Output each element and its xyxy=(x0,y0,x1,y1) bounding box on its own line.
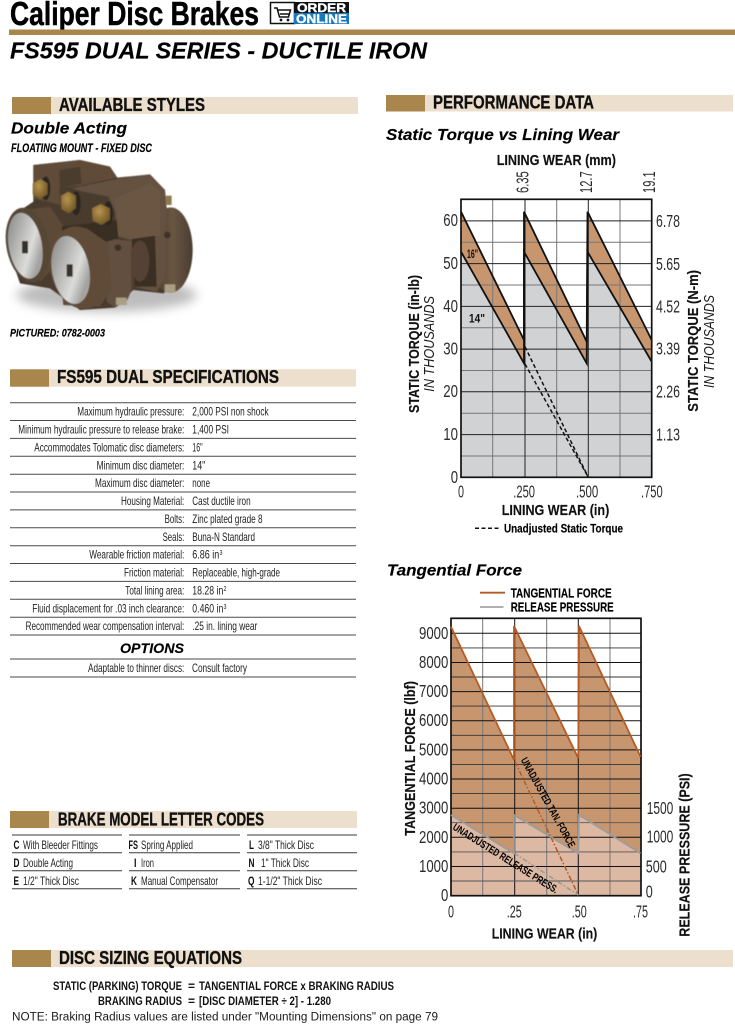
chart: static torque vs lining wear: 1.13 xyxy=(656,424,680,444)
chart: tangential force and release pressure: 1000 xyxy=(419,856,448,876)
letter codes table: I xyxy=(134,856,136,870)
specifications table: 2 xyxy=(224,586,227,593)
specifications table xyxy=(10,403,356,677)
chart: static torque vs lining wear: .500 xyxy=(576,481,598,501)
chart: tangential force and release pressure: 500 xyxy=(646,856,667,876)
note: NOTE: Braking Radius values are listed under "Mounting Dimensions" on page 79 xyxy=(12,1012,438,1024)
letter codes table: Iron xyxy=(141,856,154,870)
specifications table: Seals: xyxy=(163,530,184,544)
equations: TANGENTIAL FORCE x BRAKING RADIUS xyxy=(199,979,394,993)
specifications table: 3 xyxy=(224,604,227,611)
specifications table: Recommended wear compensation interval: xyxy=(26,619,184,633)
chart: static torque vs lining wear: 4.52 xyxy=(656,296,680,316)
chart: tangential force and release pressure: 0 xyxy=(441,885,448,905)
chart: tangential force and release pressure xyxy=(402,586,693,942)
letter codes table: K xyxy=(131,874,137,888)
chart: static torque vs lining wear: 16" xyxy=(467,247,478,261)
heading: performance data xyxy=(386,92,733,112)
letter codes table: Double Acting xyxy=(23,856,73,870)
chart: tangential force and release pressure: 8000 xyxy=(419,652,448,672)
specifications table: 0.460 in xyxy=(192,601,223,615)
chart heading: static torque: Static Torque vs Lining Wear xyxy=(386,127,620,144)
letter codes table: With Bleeder Fittings xyxy=(23,838,98,852)
chart: static torque vs lining wear: LINING WEAR (in) xyxy=(502,502,609,519)
heading: performance data: PERFORMANCE DATA xyxy=(433,92,594,112)
chart: static torque vs lining wear: Unadjusted Static Torque xyxy=(504,522,623,536)
chart: tangential force and release pressure: 1000 xyxy=(647,826,673,846)
heading: disc sizing equations xyxy=(12,947,733,968)
chart: tangential force and release pressure: UNADJUSTED TAN. FORCE xyxy=(518,756,577,850)
chart: tangential force and release pressure: RELEASE PRESSURE xyxy=(511,601,614,615)
chart: tangential force and release pressure: .25 xyxy=(507,901,522,921)
chart: tangential force and release pressure: 2000 xyxy=(419,827,448,847)
chart: static torque vs lining wear: 3.39 xyxy=(656,338,680,358)
chart: tangential force and release pressure: 0 xyxy=(448,901,454,921)
specifications table: Maximum hydraulic pressure: xyxy=(77,405,184,419)
specifications table: Zinc plated grade 8 xyxy=(192,512,263,526)
specifications table: Consult factory xyxy=(192,661,247,675)
chart: static torque vs lining wear: 0 xyxy=(451,467,458,487)
chart: static torque vs lining wear: .250 xyxy=(513,481,535,501)
specifications table: 2,000 PSI non shock xyxy=(192,405,269,419)
style subtitle: FLOATING MOUNT - FIXED DISC xyxy=(11,143,153,155)
letter codes table: 1-1/2" Thick Disc xyxy=(258,874,322,888)
chart: tangential force and release pressure: .75 xyxy=(633,901,648,921)
chart: static torque vs lining wear: STATIC TORQUE (N-m) xyxy=(685,270,702,412)
chart: static torque vs lining wear: 6.78 xyxy=(656,211,680,231)
equations: STATIC (PARKING) TORQUE xyxy=(53,979,182,993)
equations xyxy=(53,979,394,1008)
equations: = xyxy=(188,979,195,993)
specifications table: Minimum disc diameter: xyxy=(97,458,184,472)
chart: static torque vs lining wear: 20 xyxy=(443,381,458,401)
heading: disc sizing equations: DISC SIZING EQUATIONS xyxy=(59,947,242,968)
specifications table: Fluid displacement for .03 inch clearance: xyxy=(32,601,184,615)
specifications table: Cast ductile iron xyxy=(192,494,251,508)
specifications table: 1,400 PSI xyxy=(192,422,229,436)
chart: tangential force and release pressure: 4000 xyxy=(419,768,448,788)
equations: [DISC DIAMETER ÷ 2] - 1.280 xyxy=(199,994,331,1008)
chart: static torque vs lining wear: IN THOUSANDS xyxy=(701,295,718,388)
letter codes table: 3/8" Thick Disc xyxy=(258,838,314,852)
chart: tangential force and release pressure: 7000 xyxy=(419,681,448,701)
chart: static torque vs lining wear: 19.1 xyxy=(639,171,659,193)
specifications table: 16" xyxy=(192,440,203,454)
heading: available styles: AVAILABLE STYLES xyxy=(59,94,205,115)
chart: static torque vs lining wear: LINING WEAR (mm) xyxy=(497,152,616,169)
chart heading: tangential force: Tangential Force xyxy=(387,563,522,580)
specifications table: Maximum disc diameter: xyxy=(95,476,184,490)
chart: tangential force and release pressure: UNADJUSTED RELEASE PRESS. xyxy=(450,821,560,896)
letter codes table: Manual Compensator xyxy=(141,874,218,888)
chart: static torque vs lining wear: 60 xyxy=(443,210,458,230)
chart: tangential force and release pressure: 6000 xyxy=(419,710,448,730)
letter codes table: L xyxy=(249,838,254,852)
letter codes table: N xyxy=(248,856,254,870)
chart: static torque vs lining wear: STATIC TORQUE (in-lb) xyxy=(406,275,423,413)
chart: static torque vs lining wear: 50 xyxy=(443,253,458,273)
specifications table: Minimum hydraulic pressure to release brake: xyxy=(18,422,184,436)
letter codes table: C xyxy=(14,838,20,852)
specifications table: Bolts: xyxy=(165,512,184,526)
letter codes table: 1" Thick Disc xyxy=(261,856,309,870)
chart: tangential force and release pressure: 1500 xyxy=(647,798,673,818)
specifications table: Housing Material: xyxy=(121,494,184,508)
chart: tangential force and release pressure: RELEASE PRESSURE (PSI) xyxy=(676,773,693,937)
chart: tangential force and release pressure: LINING WEAR (in) xyxy=(492,925,597,942)
specifications table: 14" xyxy=(192,458,205,472)
heading: letter codes: BRAKE MODEL LETTER CODES xyxy=(58,809,264,830)
photo caption: PICTURED: 0782-0003 xyxy=(10,328,105,340)
chart: tangential force and release pressure: 0 xyxy=(646,882,653,902)
specifications table: Wearable friction material: xyxy=(89,548,184,562)
chart: static torque vs lining wear: .750 xyxy=(641,481,663,501)
photo: dual caliper brake xyxy=(0,160,197,315)
chart: static torque vs lining wear: 40 xyxy=(443,296,458,316)
style name: Double Acting xyxy=(11,120,127,138)
specifications table: 18.28 in xyxy=(192,583,223,597)
chart: tangential force and release pressure: 3000 xyxy=(419,798,448,818)
equations: = xyxy=(188,994,195,1008)
equations: BRAKING RADIUS xyxy=(98,994,182,1008)
specifications table: none xyxy=(192,476,210,490)
letter codes table: D xyxy=(14,856,20,870)
chart: static torque vs lining wear: 0 xyxy=(458,481,464,501)
chart: static torque vs lining wear xyxy=(406,152,718,536)
specifications table: Adaptable to thinner discs: xyxy=(88,661,184,675)
chart: static torque vs lining wear: 12.7 xyxy=(576,171,596,193)
chart: static torque vs lining wear: 30 xyxy=(443,338,458,358)
letter codes table xyxy=(12,835,357,889)
chart: static torque vs lining wear: 10 xyxy=(443,424,458,444)
chart: tangential force and release pressure: 5000 xyxy=(419,739,448,759)
specifications table: Replaceable, high-grade xyxy=(192,566,280,580)
chart: static torque vs lining wear: 6.35 xyxy=(512,171,532,193)
letter codes table: Q xyxy=(248,874,254,888)
chart: static torque vs lining wear: 2.26 xyxy=(656,382,680,402)
letter codes table: Spring Applied xyxy=(141,838,193,852)
icon: order online badge: ORDER xyxy=(297,1,346,15)
specifications table: Accommodates Tolomatic disc diameters: xyxy=(34,440,184,454)
letter codes table: 1/2" Thick Disc xyxy=(23,874,79,888)
letter codes table: FS xyxy=(128,838,138,852)
icon: order online badge xyxy=(270,1,349,26)
specifications table: Total lining area: xyxy=(125,583,184,597)
chart: tangential force and release pressure: .50 xyxy=(572,901,587,921)
specifications table: .25 in. lining wear xyxy=(192,619,257,633)
heading: available styles xyxy=(12,94,358,115)
title rule xyxy=(9,30,735,35)
specifications table: Friction material: xyxy=(124,566,184,580)
chart: static torque vs lining wear: 14" xyxy=(469,312,485,326)
specifications table: 3 xyxy=(220,550,223,557)
chart: tangential force and release pressure: TANGENTIAL FORCE (lbf) xyxy=(402,681,419,836)
icon: order online badge: ONLINE xyxy=(296,12,347,26)
chart: tangential force and release pressure: TANGENTIAL FORCE xyxy=(511,586,612,600)
specifications table: 6.86 in xyxy=(192,548,219,562)
letter codes table: E xyxy=(14,874,19,888)
subtitle: FS595 DUAL SERIES - DUCTILE IRON xyxy=(10,38,428,64)
heading: specifications: FS595 DUAL SPECIFICATIONS xyxy=(57,366,279,387)
chart: tangential force and release pressure: 9000 xyxy=(419,623,448,643)
chart: static torque vs lining wear: 5.65 xyxy=(656,254,680,274)
specifications table: Buna-N Standard xyxy=(192,530,255,544)
chart: static torque vs lining wear: IN THOUSANDS xyxy=(421,296,438,392)
specifications table: OPTIONS xyxy=(120,641,184,656)
